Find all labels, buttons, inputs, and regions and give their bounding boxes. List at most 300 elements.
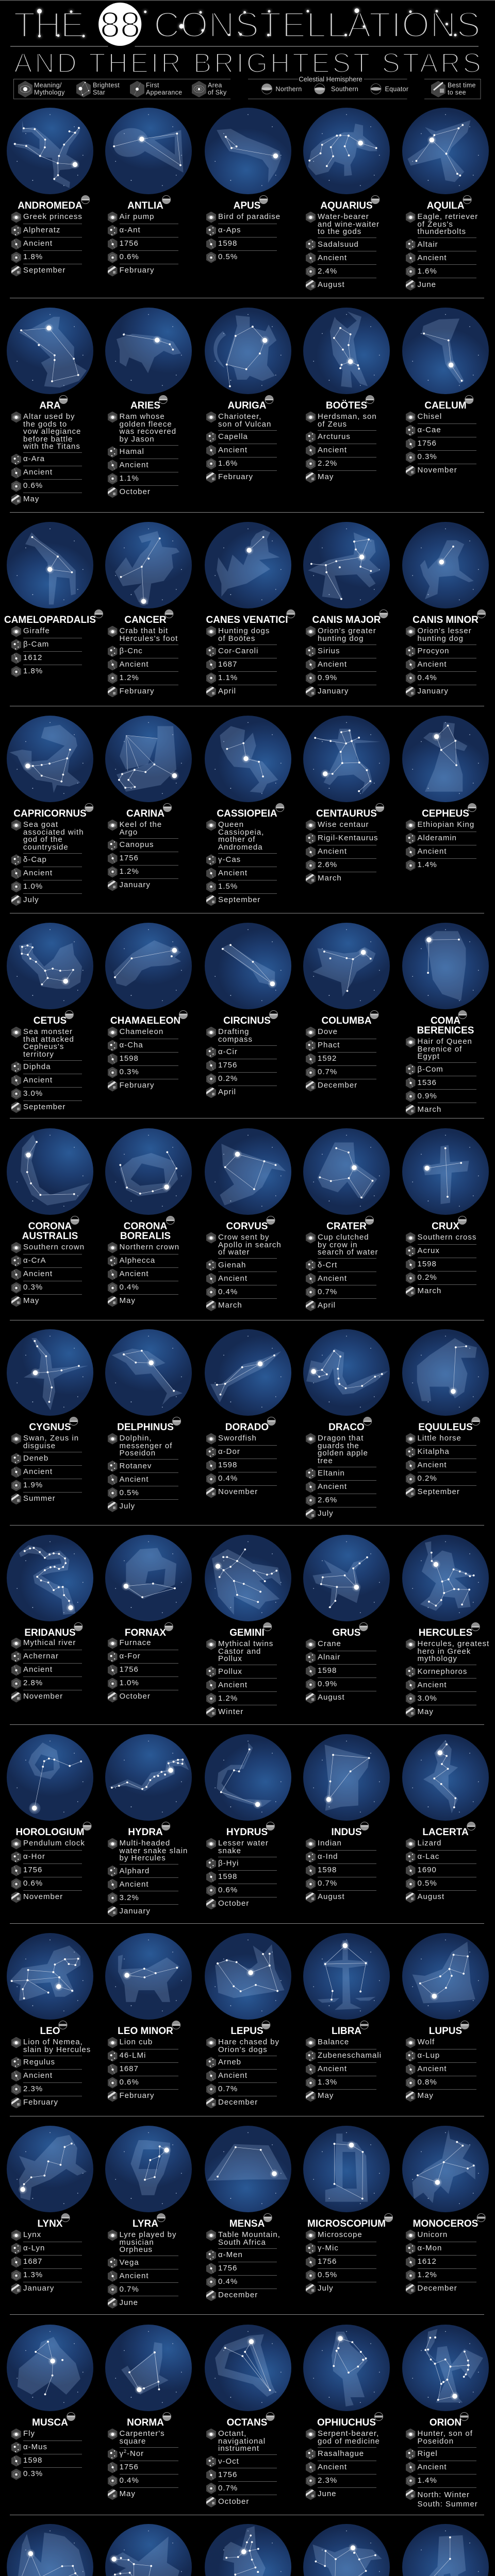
facts: Ophiuchus: 2.3% <box>318 2476 337 2485</box>
facts: Cygnus <box>23 1432 93 1505</box>
facts: Octans: ν-Oct <box>218 2457 239 2466</box>
legend: meaning <box>18 81 65 97</box>
facts: Crux: 1598 <box>418 1260 437 1268</box>
facts: Canis Minor: Orion's lesser <box>418 626 472 635</box>
facts: Delphinus: 0.5% <box>120 1488 139 1497</box>
facts: Delphinus: July <box>120 1502 135 1511</box>
facts: Libra: Zubeneschamali <box>318 2051 382 2060</box>
facts: Cassiopeia: Cassiopeia, <box>218 828 264 837</box>
facts: Delphinus: Ancient <box>120 1475 149 1484</box>
panel: Crux <box>402 1128 489 1298</box>
facts: Musca <box>23 2428 93 2481</box>
panel: Horologium <box>7 1734 93 1904</box>
facts: Draco: Ancient <box>318 1482 347 1491</box>
legend: northern <box>262 83 302 94</box>
sky disc: Aries <box>105 308 192 394</box>
facts: Andromeda: Ancient <box>23 239 53 248</box>
facts: Orion: Rigel <box>418 2449 438 2458</box>
sky disc: Caelum <box>402 308 489 394</box>
panel: Coma Berenices <box>402 923 489 1116</box>
name: Andromeda: ANDROMEDA <box>18 200 82 211</box>
facts: Equuleus <box>418 1432 489 1499</box>
facts: Canis Minor: Ancient <box>418 660 447 669</box>
facts: Corvus: Ancient <box>218 1274 248 1283</box>
sky disc: Eridanus <box>7 1535 93 1621</box>
facts: Circinus: April <box>218 1088 236 1096</box>
facts: Orion: Poseidon <box>418 2437 454 2446</box>
facts: Coma Berenices <box>418 1036 489 1116</box>
legend: meaning: Mythology <box>34 89 65 96</box>
facts: Hercules <box>418 1638 489 1718</box>
sky disc: Libra <box>303 1933 390 2020</box>
legend: first appearance: First <box>146 81 159 89</box>
panel: Cancer <box>105 522 192 697</box>
facts: Cepheus: 1.4% <box>418 860 437 869</box>
facts: Cepheus: Ancient <box>418 847 447 856</box>
facts: Lepus: December <box>218 2098 258 2107</box>
facts: Aries: October <box>120 487 151 496</box>
title line one <box>13 5 481 45</box>
panel: Carina <box>105 716 192 892</box>
facts: Orion: North: Winter <box>418 2490 470 2499</box>
sky disc: Musca <box>7 2325 93 2411</box>
facts: Lynx <box>23 2229 93 2295</box>
panel: Centaurus <box>303 716 390 885</box>
facts: Caelum: 1756 <box>418 439 437 448</box>
facts: Lynx: January <box>23 2284 54 2293</box>
facts: Lupus: Ancient <box>418 2064 447 2073</box>
facts: Hercules: hero in Greek <box>418 1647 471 1656</box>
facts: Hydra: water snake slain <box>120 1846 188 1855</box>
facts: Octans: October <box>218 2497 249 2506</box>
facts: Cetus: that attacked <box>23 1035 74 1044</box>
name: Cassiopeia: CASSIOPEIA <box>217 808 277 819</box>
facts: Lupus: α-Lup <box>418 2051 440 2060</box>
facts: Grus: 1598 <box>318 1666 337 1675</box>
name: Gemini: GEMINI <box>229 1628 265 1638</box>
facts: Centaurus: Ancient <box>318 847 347 856</box>
panel: Indus <box>303 1734 390 1904</box>
facts: Orion: Hunter, son of <box>418 2429 473 2438</box>
facts: Carina: Canopus <box>120 840 154 849</box>
facts: Antlia: February <box>120 266 155 275</box>
sky disc: Corvus <box>205 1128 291 1215</box>
facts: Mensa: α-Men <box>218 2250 243 2259</box>
facts: Lacerta: August <box>418 1892 444 1901</box>
facts: Microscopium <box>318 2229 390 2295</box>
facts: Cetus <box>23 1026 93 1114</box>
facts: Hercules: May <box>418 1707 434 1716</box>
legend: northern: Northern <box>275 86 302 93</box>
sky disc: Leo Minor <box>105 1933 192 2020</box>
sky disc: Leo <box>7 1933 93 2020</box>
facts: Canes Venatici: April <box>218 687 236 696</box>
facts: Gemini: 1.2% <box>218 1694 238 1703</box>
facts: Equuleus: Little horse <box>418 1434 461 1443</box>
name: Corona Borealis: BOREALIS <box>120 1231 171 1242</box>
panel: Pegasus <box>105 2524 192 2576</box>
name: Aquila: AQUILA <box>427 200 464 211</box>
name: Corona Australis <box>22 1222 78 1241</box>
facts: Caelum: 0.3% <box>418 452 437 461</box>
facts: Caelum: α-Cae <box>418 426 441 434</box>
facts: Eridanus: Achernar <box>23 1652 59 1660</box>
facts: Orion: Ancient <box>418 2463 447 2471</box>
facts: Corona Australis: Southern crown <box>23 1243 85 1251</box>
name: Corvus: CORVUS <box>226 1221 268 1232</box>
facts: Canes Venatici: 1687 <box>218 660 237 669</box>
facts: Orion: South: Summer <box>418 2500 478 2509</box>
facts: Draco: tree <box>318 1456 333 1465</box>
facts: Fornax <box>120 1637 192 1703</box>
facts: Grus: 0.9% <box>318 1680 337 1688</box>
facts: Coma Berenices: Berenice of <box>418 1045 462 1054</box>
sky disc: Grus <box>303 1535 390 1621</box>
facts: Caelum: November <box>418 466 457 474</box>
legend frames <box>13 79 481 99</box>
name: Coma Berenices: BERENICES <box>417 1025 474 1036</box>
facts: Hydrus: 1598 <box>218 1872 237 1881</box>
facts: Corvus: Apollo in search <box>218 1241 282 1249</box>
facts: Ara: Ancient <box>23 468 53 477</box>
facts: Corona Borealis: 0.4% <box>120 1283 139 1292</box>
panel: Aries <box>105 308 192 498</box>
facts: Grus: Crane <box>318 1639 341 1648</box>
facts: Gemini <box>218 1638 291 1718</box>
panel: Eridanus <box>7 1535 93 1703</box>
facts: Cygnus: disguise <box>23 1442 56 1450</box>
facts: Norma: 0.4% <box>120 2476 139 2485</box>
facts: Gemini: Winter <box>218 1707 243 1716</box>
panel: Circinus <box>205 923 291 1099</box>
sky disc: Capricornus <box>7 716 93 802</box>
facts: Chamaeleon: 1598 <box>120 1054 139 1063</box>
facts: Ara: before battle <box>23 435 73 444</box>
panel: Apus <box>205 108 291 263</box>
facts: Cetus: September <box>23 1103 65 1111</box>
facts: Musca: Fly <box>23 2429 35 2438</box>
sky disc: Fornax <box>105 1535 192 1621</box>
facts: Crater: Cup clutched <box>318 1233 369 1242</box>
name: Orion: ORION <box>430 2417 461 2428</box>
panel: Microscopium <box>303 2126 390 2295</box>
panel: Andromeda <box>7 108 93 276</box>
facts: Capricornus: countryside <box>23 843 69 852</box>
facts: Draco: Eltanin <box>318 1469 345 1478</box>
facts: Aquila: Eagle, retriever <box>418 212 478 221</box>
facts: Horologium: α-Hor <box>23 1852 45 1861</box>
facts: Equuleus: Kitalpha <box>418 1447 450 1456</box>
facts: Hydrus: 0.6% <box>218 1886 238 1894</box>
facts: Corvus: of water <box>218 1248 250 1257</box>
panel: Leo <box>7 1933 93 2109</box>
panel: Delphinus <box>105 1329 192 1513</box>
facts: Horologium <box>23 1837 93 1904</box>
facts: Coma Berenices: Hair of Queen <box>418 1037 472 1046</box>
facts: Ophiuchus: Serpent-bearer, <box>318 2429 379 2438</box>
panel: Draco <box>303 1329 390 1520</box>
facts: Cassiopeia: Queen <box>218 820 244 829</box>
facts: Corvus: Gienah <box>218 1261 246 1269</box>
facts: Hercules: mythology <box>418 1654 457 1663</box>
facts: Lacerta: α-Lac <box>418 1852 439 1861</box>
name: Canis Major: CANIS MAJOR <box>312 615 381 625</box>
facts: Apus <box>206 212 280 263</box>
facts: Ara: 0.6% <box>23 481 43 490</box>
facts: Canis Minor <box>418 625 489 698</box>
sky disc: Lepus <box>205 1933 291 2020</box>
facts: Delphinus: Dolphin, <box>120 1434 152 1443</box>
facts: Cancer: February <box>120 687 155 696</box>
name: Lepus: LEPUS <box>230 2026 263 2037</box>
name: Apus: APUS <box>234 200 260 211</box>
facts: Monoceros: α-Mon <box>418 2244 442 2252</box>
name: Crux: CRUX <box>432 1221 459 1232</box>
name: Cancer: CANCER <box>124 615 167 625</box>
facts: Corona Borealis: Northern crown <box>120 1243 179 1251</box>
legend: southern <box>315 83 358 94</box>
facts: Apus: Bird of paradise <box>218 212 280 221</box>
legend: equator: Equator <box>385 86 408 93</box>
legend: best time to see: Best time <box>448 81 476 89</box>
facts: Octans: 1756 <box>218 2470 237 2479</box>
facts: Cetus: Sea monster <box>23 1027 73 1036</box>
facts: Octans: 0.7% <box>218 2484 238 2493</box>
facts: Ara <box>11 412 82 505</box>
facts: Ara: May <box>23 495 39 503</box>
facts: Cancer: 1.2% <box>120 673 139 682</box>
facts: Camelopardalis: 1.8% <box>23 667 43 675</box>
panel: Libra <box>303 1933 390 2103</box>
facts: Eridanus <box>23 1637 93 1703</box>
facts: Leo Minor: Lion cub <box>120 2038 153 2046</box>
facts: Circinus: α-Cir <box>218 1047 238 1056</box>
facts: Cancer: β-Cnc <box>120 647 143 655</box>
facts: Auriga: Capella <box>218 432 248 441</box>
facts: Cepheus: Ethiopian King <box>418 820 474 829</box>
facts: Cygnus: Summer <box>23 1494 56 1503</box>
name: Auriga: AURIGA <box>228 400 266 411</box>
name: Circinus: CIRCINUS <box>223 1015 271 1026</box>
name: Equuleus: EQUULEUS <box>418 1422 473 1433</box>
facts: Draco: 2.6% <box>318 1496 337 1504</box>
panel: Corona Borealis <box>105 1128 192 1308</box>
facts: Columba: 1592 <box>318 1054 337 1063</box>
facts: Circinus: compass <box>218 1035 253 1044</box>
facts: Cancer <box>108 626 178 697</box>
facts: Norma: May <box>120 2489 136 2498</box>
facts: Lepus: Ancient <box>218 2071 248 2080</box>
panel: Fornax <box>105 1535 192 1703</box>
panel: Canes Venatici <box>205 522 295 697</box>
legend: brightest star <box>76 81 120 97</box>
facts: Carina: Argo <box>120 828 138 837</box>
sky disc: Monoceros <box>402 2126 489 2212</box>
facts: Boötes: May <box>318 472 334 481</box>
facts: Apus: 1598 <box>218 239 237 248</box>
facts: Lupus: Wolf <box>418 2038 435 2046</box>
name: Libra: LIBRA <box>332 2026 361 2037</box>
facts: Corona Australis: α-CrA <box>23 1256 46 1265</box>
panel: Lupus <box>402 1933 489 2103</box>
facts: Crater: search of water <box>318 1248 378 1257</box>
facts: Cetus: 3.0% <box>23 1089 43 1098</box>
facts: Camelopardalis: β-Cam <box>23 640 49 649</box>
facts: Mensa <box>218 2229 291 2302</box>
facts: Leo Minor: 0.6% <box>120 2078 139 2087</box>
facts: Canes Venatici: 1.1% <box>218 673 238 682</box>
facts: Lynx: α-Lyn <box>23 2244 45 2252</box>
panel: Ara <box>7 308 93 505</box>
facts: Grus <box>318 1638 390 1704</box>
facts: Cygnus: Deneb <box>23 1454 48 1463</box>
facts: Canes Venatici: Cor-Caroli <box>218 647 258 655</box>
name: Lupus: LUPUS <box>429 2026 462 2037</box>
sky disc: Ara <box>7 308 93 394</box>
name: Coma Berenices <box>417 1016 474 1036</box>
facts: Lynx: 1.3% <box>23 2270 43 2279</box>
name: Antlia: ANTLIA <box>127 200 163 211</box>
facts: Cancer: Ancient <box>120 660 149 669</box>
facts: Aries: by Jason <box>120 435 155 444</box>
facts: Canis Major: hunting dog <box>318 634 364 643</box>
sky disc: Pavo <box>7 2524 93 2576</box>
facts: Leo: Ancient <box>23 2071 53 2080</box>
facts: Camelopardalis: 1612 <box>23 653 42 662</box>
facts: Aquila <box>406 212 478 291</box>
name: Fornax: FORNAX <box>125 1628 166 1638</box>
name: Hydrus: HYDRUS <box>226 1827 268 1838</box>
facts: Crux: Southern cross <box>418 1233 476 1242</box>
sky disc: Aquarius <box>303 108 390 194</box>
facts: Delphinus <box>120 1432 192 1513</box>
facts: Lupus <box>418 2036 489 2103</box>
facts: Aquarius: Ancient <box>318 253 347 262</box>
panel: Cetus <box>7 923 93 1114</box>
facts: Fornax: α-For <box>120 1652 141 1660</box>
facts: Auriga: Ancient <box>218 446 248 454</box>
facts: Hercules: Kornephoros <box>418 1667 467 1676</box>
facts: Leo Minor: 1687 <box>120 2064 139 2073</box>
facts: Fornax: Furnace <box>120 1638 152 1647</box>
panel: Crater <box>303 1128 390 1312</box>
sky disc: Lacerta <box>402 1734 489 1821</box>
facts: Auriga: 1.6% <box>218 459 238 468</box>
title line one: 88 <box>100 5 140 45</box>
facts: Octans: navigational <box>218 2437 266 2446</box>
panel: Perseus <box>205 2524 291 2576</box>
facts: Dorado: Swordfish <box>218 1434 257 1443</box>
facts: Gemini: Castor and <box>218 1647 261 1656</box>
panel: Lepus <box>205 1933 291 2109</box>
panel: Aquila <box>402 108 489 291</box>
name: Mensa: MENSA <box>229 2218 265 2229</box>
facts: Crux <box>418 1231 489 1298</box>
facts: Ophiuchus <box>318 2428 390 2501</box>
name: Columba: COLUMBA <box>321 1015 372 1026</box>
legend: equator <box>371 83 408 94</box>
facts: Aquila: 1.6% <box>418 267 437 276</box>
facts: Camelopardalis <box>11 626 82 677</box>
facts: Cygnus: Ancient <box>23 1467 53 1476</box>
facts: Cassiopeia: mother of <box>218 835 255 844</box>
facts: Corona Borealis: Ancient <box>120 1269 149 1278</box>
facts: Orion: 1.4% <box>418 2476 437 2485</box>
facts: Eridanus: Ancient <box>23 1665 53 1674</box>
legend: brightest star: Brightest <box>93 81 120 89</box>
facts: Boötes: of Zeus <box>318 420 347 429</box>
sky disc: Lyra <box>105 2126 192 2212</box>
panel: Camelopardalis <box>4 522 103 677</box>
facts: Aquila: Altair <box>418 240 438 249</box>
name: Cetus: CETUS <box>34 1015 67 1026</box>
facts: Hydra <box>120 1837 192 1918</box>
facts: Gemini: Ancient <box>218 1681 248 1689</box>
facts: Mensa: 0.4% <box>218 2277 238 2286</box>
facts: Leo Minor: February <box>120 2091 155 2100</box>
sky disc: Cetus <box>7 923 93 1009</box>
facts: Capricornus: Ancient <box>23 869 53 877</box>
panel: Cassiopeia <box>205 716 291 907</box>
facts: Boötes <box>306 412 377 483</box>
facts: Fornax: 1756 <box>120 1665 139 1674</box>
sky disc: Draco <box>303 1329 390 1416</box>
facts: Corona Australis: Ancient <box>23 1269 53 1278</box>
legend: meaning: Meaning/ <box>34 81 62 89</box>
panel: Aquarius <box>303 108 390 291</box>
facts: Norma: Carpenter's <box>120 2429 165 2438</box>
facts: Delphinus: Rotanev <box>120 1462 152 1470</box>
sky disc: Circinus <box>205 923 291 1009</box>
facts: Columba: Phact <box>318 1041 340 1049</box>
facts: Hydra: Ancient <box>120 1880 149 1889</box>
facts: Antlia: α-Ant <box>120 226 141 234</box>
sky disc: Cygnus <box>7 1329 93 1416</box>
legend heading: celestial hemisphere: Celestial Hemisphere <box>299 75 362 83</box>
facts: Dorado: November <box>218 1487 258 1496</box>
panel: Musca <box>7 2325 93 2481</box>
sky disc: Andromeda <box>7 108 93 194</box>
name: Carina: CARINA <box>126 808 164 819</box>
facts: Coma Berenices: 1536 <box>418 1078 437 1087</box>
sky disc: Cancer <box>105 522 192 608</box>
name: Musca: MUSCA <box>32 2417 68 2428</box>
facts: Gemini: Pollux <box>218 1654 242 1663</box>
facts: Grus: Alnair <box>318 1653 340 1662</box>
facts: Crater <box>318 1231 390 1312</box>
sky disc: Auriga <box>205 308 291 394</box>
panel: Pavo <box>7 2524 93 2576</box>
facts: Circinus <box>218 1026 291 1099</box>
facts: Canis Minor: January <box>418 687 449 696</box>
panel: Octans <box>205 2325 291 2508</box>
facts: Canis Minor: hunting dog <box>418 634 464 643</box>
facts: Cepheus <box>418 819 489 872</box>
panel: Auriga <box>205 308 291 483</box>
facts: Canis Major: 0.9% <box>318 673 337 682</box>
sky disc: Aquila <box>402 108 489 194</box>
facts: Leo: slain by Hercules <box>23 2045 91 2054</box>
facts: Draco: July <box>318 1509 334 1518</box>
facts: Dorado: 1598 <box>218 1461 237 1469</box>
facts: Mensa: South Africa <box>218 2238 266 2247</box>
facts: Aquarius: Sadalsuud <box>318 240 359 249</box>
facts: Hydrus: October <box>218 1899 249 1908</box>
facts: Centaurus: March <box>318 874 342 883</box>
facts: Cassiopeia: Andromeda <box>218 843 263 852</box>
title stars <box>39 11 455 36</box>
facts: Musca: 0.3% <box>23 2469 43 2478</box>
